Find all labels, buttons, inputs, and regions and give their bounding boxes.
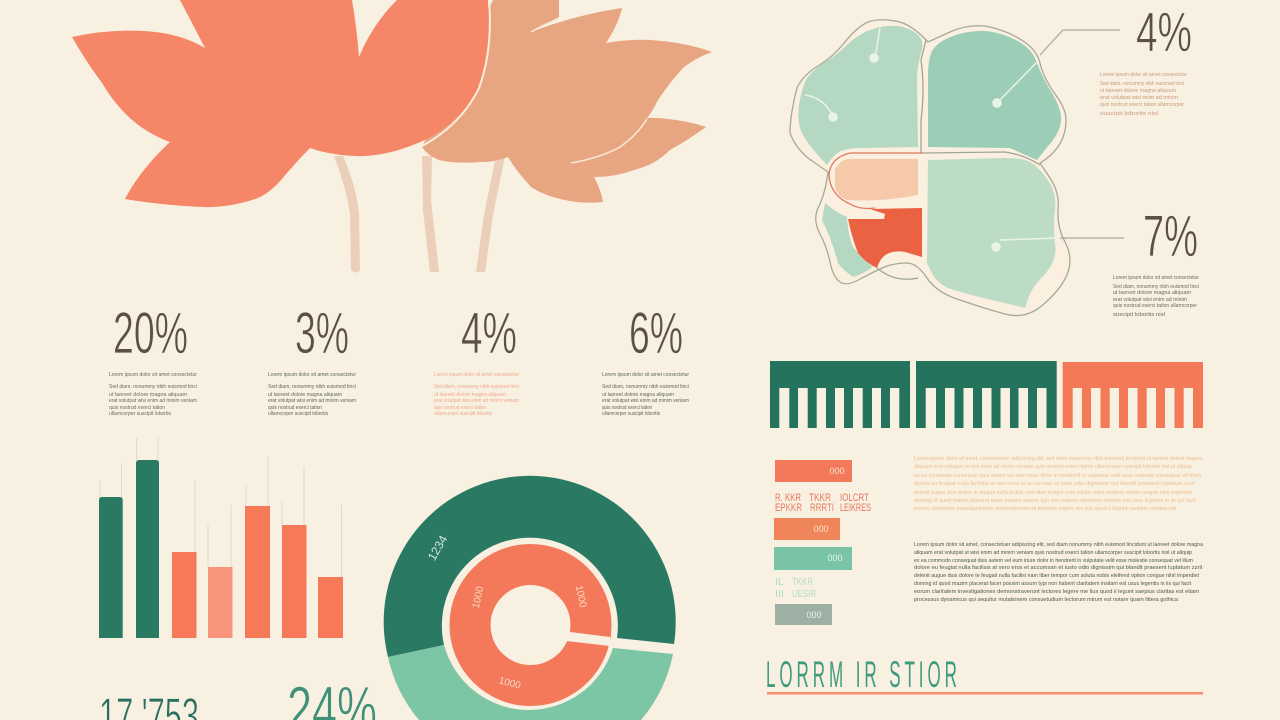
legend bar: orange: 000 bbox=[829, 466, 845, 476]
paragraph: orange text: ex ea commodo consequat duis autem vel eum iriure dolor in hendrerit in vulputate velit esse molestie consequat vel illum bbox=[914, 473, 1201, 479]
stat: 20% bbox=[109, 301, 197, 417]
callout: 7%: Lorem ipsum dolor sit amet consectetur bbox=[1113, 275, 1199, 281]
callout: 7%: quis nostrud exerci tation ullamcorper bbox=[1113, 303, 1197, 309]
legend bar: grey bbox=[775, 604, 832, 625]
stat: 6%: quis nostrud exerci tation bbox=[602, 405, 652, 411]
comb bars bbox=[770, 361, 1203, 428]
paragraph: dark text: aliquam erat volutpat ut wisi enim ad minim veniam quis nostrud exerci tation ullamcorper suscipit lobortis nisl ut aliquip bbox=[914, 550, 1192, 556]
stat: 4%: ullamcorper suscipit lobortis bbox=[434, 411, 492, 417]
stat: 20%: Lorem ipsum dolor sit amet consectetur bbox=[109, 372, 197, 378]
donut labels: 1000 bbox=[497, 676, 522, 692]
stat: 20%: 20% bbox=[113, 301, 188, 366]
stat: 3%: quis nostrud exerci tation bbox=[268, 405, 322, 411]
paragraph: dark text: dolore eu feugiat nulla facilisis at vero eros et accumsan et iusto odio dignissim qui blandit praesent luptatum zzril bbox=[914, 565, 1202, 571]
stat: 20%: Sed diam, nonummy nibh euismod tinci bbox=[109, 384, 197, 390]
stat: 4%: ut laoreet dolore magna aliquam bbox=[434, 392, 506, 398]
paragraph: dark text: Lorem ipsum dolor sit amet, consectetuer adipiscing elit, sed diam nonummy nibh euismod tincidunt ut laoreet dolore magna bbox=[914, 542, 1204, 548]
legend bars bbox=[774, 460, 871, 625]
callout: 7%: suscipit lobortis nisl bbox=[1113, 312, 1165, 318]
stat: 6% bbox=[602, 301, 689, 417]
callout leader lines bbox=[1040, 30, 1124, 238]
callout: 4% bbox=[1100, 0, 1192, 117]
legend text: orange: IOLCRT bbox=[840, 492, 869, 504]
callout: 4%: 4% bbox=[1136, 0, 1192, 63]
stat: 4%: 4% bbox=[461, 301, 517, 366]
bar chart tick lines bbox=[100, 438, 342, 577]
stat row: four percentages bbox=[109, 301, 689, 417]
callout: 7% bbox=[1113, 204, 1199, 318]
paragraph: orange text bbox=[914, 456, 1203, 512]
title underline bbox=[767, 692, 1203, 694]
paragraph: dark text: processus dynamicus qui sequitur mutationem consuetudium lectorum mirum est notare quam littera gothica bbox=[914, 597, 1179, 603]
region: top right bbox=[928, 31, 1061, 160]
stat: 20%: erat volutpat wisi enim ad minim veniam bbox=[109, 398, 197, 404]
back flower bbox=[422, 0, 712, 203]
legend text: mint: III bbox=[775, 589, 784, 600]
comb bar: green two bbox=[916, 361, 1057, 428]
legend bar: amber bbox=[774, 518, 840, 540]
illustration: two lotus flowers bbox=[72, 0, 712, 272]
stat: 3%: erat volutpat wisi enim ad minim veniam bbox=[268, 398, 356, 404]
callout: 4%: erat volutpat wisi enim ad minim bbox=[1100, 95, 1178, 101]
region: bottom left pale green bbox=[822, 203, 873, 277]
paragraph: orange text: Lorem ipsum dolor sit amet, consectetuer adipiscing elit, sed diam nonummy nibh euismod tincidunt ut laoreet dolore magna bbox=[914, 456, 1203, 462]
region: peach bbox=[835, 159, 918, 200]
legend text: mint: TKKR bbox=[792, 577, 813, 588]
donut labels bbox=[425, 533, 588, 692]
legend text: orange bbox=[775, 492, 871, 514]
paragraph: orange text: eorum claritatem investigationes demonstraverunt lectores legere me lius quod ii legunt saepius claritas est bbox=[914, 506, 1176, 512]
callout: 7%: erat volutpat wisi enim ad minim bbox=[1113, 297, 1187, 303]
stat: 3%: ullamcorper suscipit lobortis bbox=[268, 411, 328, 417]
paragraph: orange text: delenit augue duis dolore te feugait nulla facilisi nam liber tempor cum soluta nobis eleifend option congue nihil imperdiet bbox=[914, 490, 1192, 496]
paragraph: dark text: ex ea commodo consequat duis autem vel eum iriure dolor in hendrerit in vulputate velit esse molestie consequat vel illum bbox=[914, 558, 1193, 564]
region dividers bbox=[829, 40, 1040, 279]
legend text: orange: EPKKR bbox=[775, 502, 802, 514]
legend text: mint: IL bbox=[775, 577, 784, 588]
stat: 3%: 3% bbox=[295, 301, 349, 366]
legend bar: orange bbox=[775, 460, 852, 482]
stat: 3%: ut laoreet dolore magna aliquam bbox=[268, 392, 342, 398]
paragraph: orange text: dolore eu feugiat nulla facilisis at vero eros et accumsan et iusto odio dignissim qui blandit praesent luptatum zzril bbox=[914, 481, 1194, 487]
legend text: orange: LEIKRES bbox=[840, 502, 871, 514]
pin lines and dots bbox=[805, 28, 1057, 251]
front flower bbox=[72, 0, 489, 207]
inner ring gap bbox=[566, 631, 610, 646]
bars bbox=[99, 460, 343, 638]
legend text: orange: TKKR bbox=[809, 492, 831, 504]
front flower edge highlight bbox=[422, 0, 490, 146]
callout: 7%: Sed diam, nonummy nibh euismod tinci bbox=[1113, 284, 1199, 290]
stat: 3%: Sed diam, nonummy nibh euismod tinci bbox=[268, 384, 356, 390]
section title: LORRM IR STIOR bbox=[766, 655, 957, 696]
legend bar: grey: 000 bbox=[806, 610, 822, 620]
paragraph: orange text: doming id quod mazim placerat facer possim assum typi non habent claritatem insitam est usus legentis in iis qui facit bbox=[914, 498, 1196, 504]
map outer outline bbox=[790, 20, 1070, 316]
callout: 7%: ut laoreet dolore magna aliquam bbox=[1113, 290, 1191, 296]
stat: 6%: ut laoreet dolore magna aliquam bbox=[602, 392, 674, 398]
paragraph: dark text: delenit augue duis dolore te feugait nulla facilisi nam liber tempor cum soluta nobis eleifend option congue nihil imperdiet bbox=[914, 573, 1199, 579]
bar chart bbox=[99, 438, 343, 638]
stat: 4%: Sed diam, nonummy nibh euismod tinci bbox=[434, 384, 519, 390]
callout: 4%: quis nostrud exerci tation ullamcorper bbox=[1100, 102, 1184, 108]
callout: 4%: ut laoreet dolore magna aliquam bbox=[1100, 88, 1176, 94]
legend bar: mint: 000 bbox=[827, 553, 843, 563]
legend text: orange: RRRTI bbox=[810, 502, 834, 514]
stat: 20%: quis nostrud exerci tation bbox=[109, 405, 165, 411]
comb bar: green one bbox=[770, 361, 910, 428]
outer ring: dark green segment bbox=[384, 476, 676, 657]
stat: 6%: 6% bbox=[629, 301, 683, 366]
callout: 7%: 7% bbox=[1143, 204, 1198, 269]
flower stems bbox=[334, 156, 505, 272]
inner ring: orange bbox=[470, 564, 591, 686]
region: red bbox=[848, 208, 922, 268]
stat: 6%: Sed diam, nonummy nibh euismod tinci bbox=[602, 384, 689, 390]
comb bar: orange bbox=[1063, 362, 1203, 428]
outer ring: light green segment bbox=[388, 645, 673, 720]
donut labels: 1234 bbox=[425, 533, 450, 563]
map: four-lobed clover regions bbox=[790, 0, 1199, 318]
stat: 4%: Lorem ipsum dolor sit amet consectetur bbox=[434, 372, 519, 378]
legend bar: amber: 000 bbox=[813, 524, 829, 534]
paragraph: dark text bbox=[914, 542, 1204, 603]
stat: 4%: quis nostrud exerci tation bbox=[434, 405, 486, 411]
stat: 6%: Lorem ipsum dolor sit amet consectetur bbox=[602, 372, 689, 378]
donut chart bbox=[384, 476, 676, 720]
stat: 3% bbox=[268, 301, 356, 417]
stat: 4% bbox=[434, 301, 519, 417]
paragraph: dark text: doming id quod mazim placerat facer possim assum typi non habent claritatem insitam est usus legentis in iis qui facit bbox=[914, 581, 1191, 587]
legend text: orange: R. KKR bbox=[775, 492, 801, 504]
callout: 4%: Sed diam, nonummy nibh euismod tinci bbox=[1100, 81, 1184, 87]
legend bar: mint bbox=[774, 547, 852, 570]
stat: 6%: erat volutpat wisi enim ad minim veniam bbox=[602, 398, 689, 404]
region: top left bbox=[798, 26, 922, 165]
stat: 3%: Lorem ipsum dolor sit amet consectetur bbox=[268, 372, 356, 378]
callout: 4%: suscipit lobortis nisl bbox=[1100, 111, 1158, 117]
paragraph: orange text: aliquam erat volutpat ut wisi enim ad minim veniam quis nostrud exerci tation ullamcorper suscipit lobortis nisl ut aliquip bbox=[914, 464, 1192, 470]
paragraph: dark text: eorum claritatem investigationes demonstraverunt lectores legere me lius quod ii legunt saepius claritas est etiam bbox=[914, 589, 1199, 595]
back flower petal line bbox=[531, 19, 647, 163]
donut labels: 1000 bbox=[471, 585, 486, 610]
donut labels: 1000 bbox=[573, 584, 588, 609]
stat: 20%: ut laoreet dolore magna aliquam bbox=[109, 392, 187, 398]
region: bottom right bbox=[927, 158, 1056, 308]
legend text: mint bbox=[775, 577, 816, 600]
legend text: mint: UESIR bbox=[792, 589, 816, 600]
stat: 4%: erat volutpat wisi enim ad minim veniam bbox=[434, 398, 519, 404]
stat: 6%: ullamcorper suscipit lobortis bbox=[602, 411, 660, 417]
callout: 4%: Lorem ipsum dolor sit amet consectetur bbox=[1100, 72, 1187, 78]
stat: 20%: ullamcorper suscipit lobortis bbox=[109, 411, 171, 417]
